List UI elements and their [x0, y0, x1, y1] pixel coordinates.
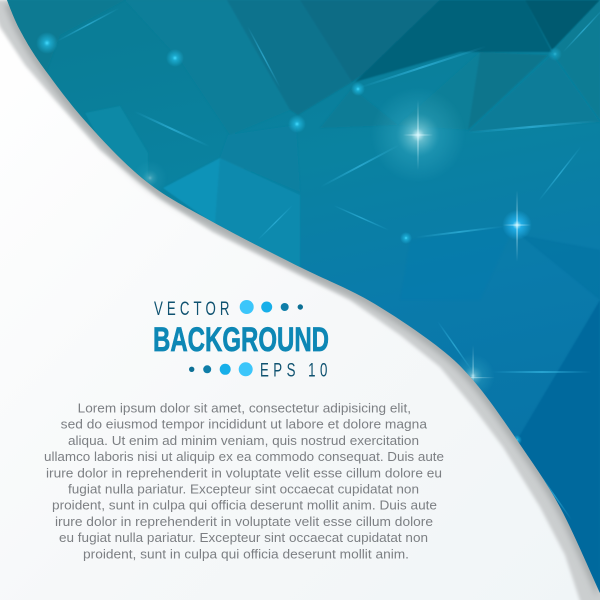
dots: bottom row [189, 362, 253, 376]
sparkle: blue star [504, 192, 531, 260]
heading lockup [153, 297, 329, 381]
body text block: Lorem ipsum dolor sit amet, consectetur adipisicing elit, [78, 402, 411, 416]
body text block: proident, sunt in culpa qui officia deserunt mollit anim. [83, 547, 409, 561]
sparkle: large white star [382, 99, 454, 170]
body text block: proident, sunt in culpa qui officia deserunt mollit anim. Duis aute [52, 499, 437, 513]
heading: EPS 10: EPS 10 [260, 359, 327, 381]
heading: VECTOR: VECTOR [154, 297, 229, 320]
body text block: eu fugiat nulla pariatur. Excepteur sint occaecat cupidatat non [59, 531, 428, 545]
glowing nodes [36, 32, 562, 445]
body text block: ullamco laboris nisi ut aliquip ex ea commodo consequat. Duis aute [44, 450, 444, 464]
dots: top row [240, 300, 303, 314]
light rays [56, 7, 600, 520]
body text block: aliqua. Ut enim ad minim veniam, quis nostrud exercitation [68, 434, 419, 448]
body text block [44, 402, 444, 561]
heading: BACKGROUND: BACKGROUND [153, 321, 329, 359]
body text block: irure dolor in reprehenderit in voluptate velit esse cillum dolore eu [46, 466, 442, 480]
body text block: irure dolor in reprehenderit in voluptate velit esse cillum dolore [55, 515, 433, 529]
body text block: fugiat nulla pariatur. Excepteur sint occaecat cupidatat non [68, 482, 419, 496]
body text block: sed do eiusmod tempor incididunt ut labore et dolore magna [61, 418, 427, 432]
sparkle: lower edge star [462, 347, 494, 389]
